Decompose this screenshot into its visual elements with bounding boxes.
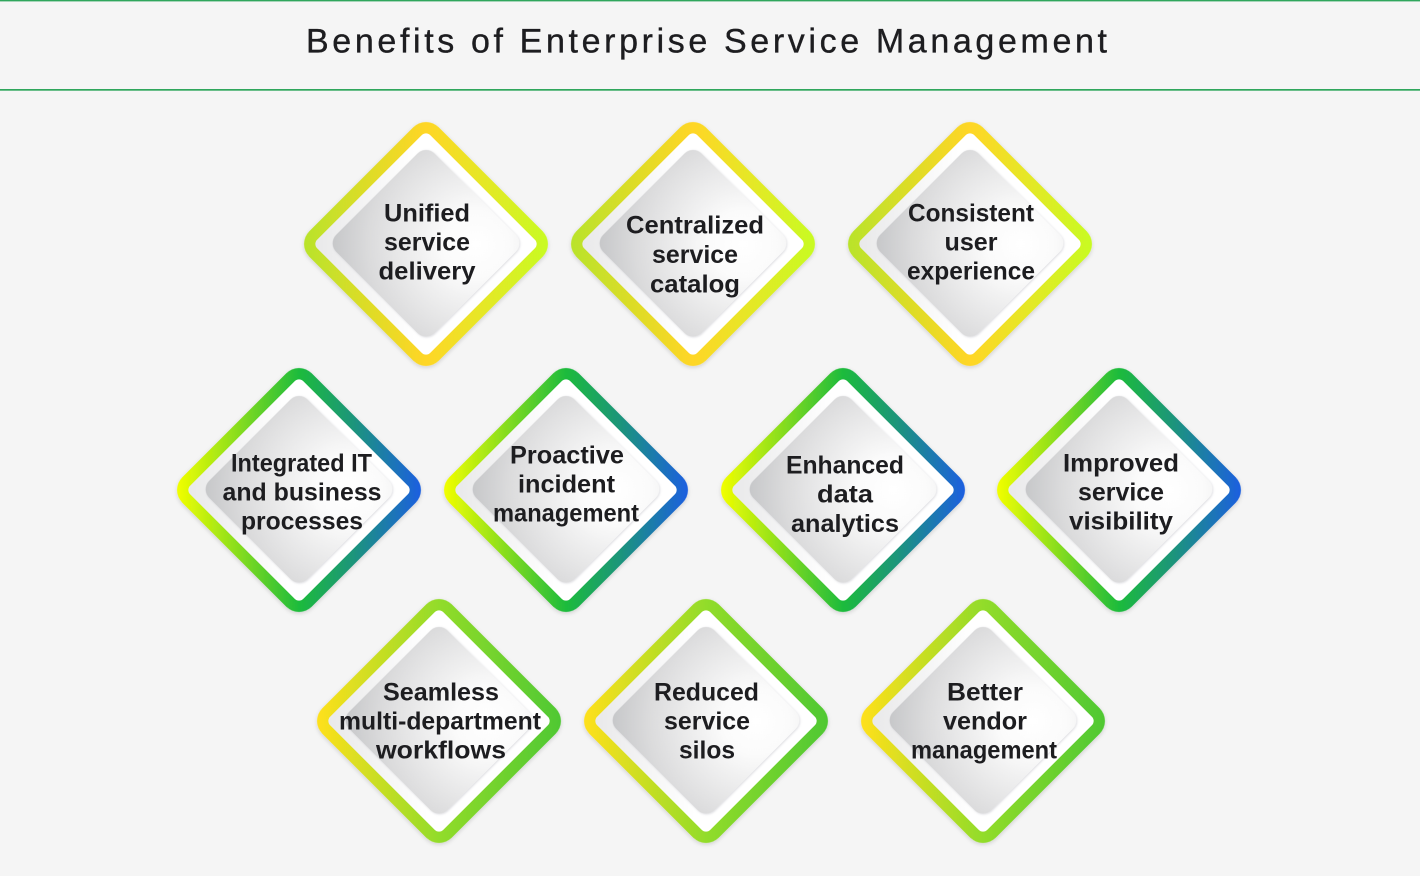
label: Unified service delivery: Unified: [384, 200, 470, 228]
label: Proactive incident management: management: [493, 500, 640, 528]
label: Seamless multi-department workflows: workflows: [375, 736, 506, 764]
label: Reduced service silos: [654, 678, 759, 764]
diamond: Consistent user experience: [841, 115, 1099, 373]
label: Centralized service catalog: service: [652, 241, 738, 269]
label: Integrated IT and business processes: [222, 450, 382, 536]
label: Enhanced data analytics: Enhanced: [786, 452, 904, 480]
title: Benefits of Enterprise Service Management: [306, 22, 1108, 60]
diamond: Reduced service silos: [577, 592, 835, 850]
label: Consistent user experience: Consistent: [908, 200, 1035, 228]
diamond: Proactive incident management: [437, 361, 695, 619]
label: Reduced service silos: Reduced: [654, 678, 759, 706]
diamond: Centralized service catalog: [564, 115, 822, 373]
label: Centralized service catalog: Centralized: [626, 212, 764, 240]
label: Proactive incident management: incident: [518, 470, 616, 498]
diamond: Integrated IT and business processes: [170, 361, 428, 619]
label: Unified service delivery: [378, 200, 476, 286]
label: Centralized service catalog: [626, 212, 764, 298]
label: Reduced service silos: silos: [679, 736, 735, 764]
label: Seamless multi-department workflows: multi-department: [339, 708, 542, 736]
label: Integrated IT and business processes: and business: [222, 478, 382, 506]
label: Centralized service catalog: catalog: [650, 270, 740, 298]
label: Proactive incident management: [493, 442, 640, 528]
label: Unified service delivery: service: [384, 228, 470, 256]
label: Reduced service silos: service: [664, 708, 750, 736]
label: Better vendor management: Better: [947, 678, 1023, 706]
label: Better vendor management: [911, 678, 1058, 764]
label: Better vendor management: management: [911, 736, 1058, 764]
diamond: Improved service visibility: [990, 361, 1248, 619]
label: Improved service visibility: visibility: [1069, 508, 1173, 536]
label: Consistent user experience: user: [944, 228, 998, 256]
label: Better vendor management: vendor: [943, 708, 1027, 736]
label: Enhanced data analytics: analytics: [791, 510, 899, 538]
label: Unified service delivery: delivery: [378, 258, 476, 286]
label: Improved service visibility: service: [1078, 478, 1164, 506]
label: Enhanced data analytics: [786, 452, 904, 538]
label: Consistent user experience: [907, 200, 1035, 286]
diamond: Better vendor management: [854, 592, 1112, 850]
label: Integrated IT and business processes: Integrated IT: [231, 450, 372, 478]
label: Seamless multi-department workflows: [339, 678, 542, 764]
label: Improved service visibility: [1063, 450, 1179, 536]
label: Integrated IT and business processes: processes: [241, 508, 363, 536]
diamond: Enhanced data analytics: [714, 361, 972, 619]
label: Enhanced data analytics: data: [817, 480, 874, 508]
diamond: Seamless multi-department workflows: [310, 592, 568, 850]
label: Seamless multi-department workflows: Seamless: [383, 678, 499, 706]
label: Improved service visibility: Improved: [1063, 450, 1179, 478]
label: Proactive incident management: Proactive: [510, 442, 624, 470]
diamond: Unified service delivery: [297, 115, 555, 373]
label: Consistent user experience: experience: [907, 258, 1035, 286]
